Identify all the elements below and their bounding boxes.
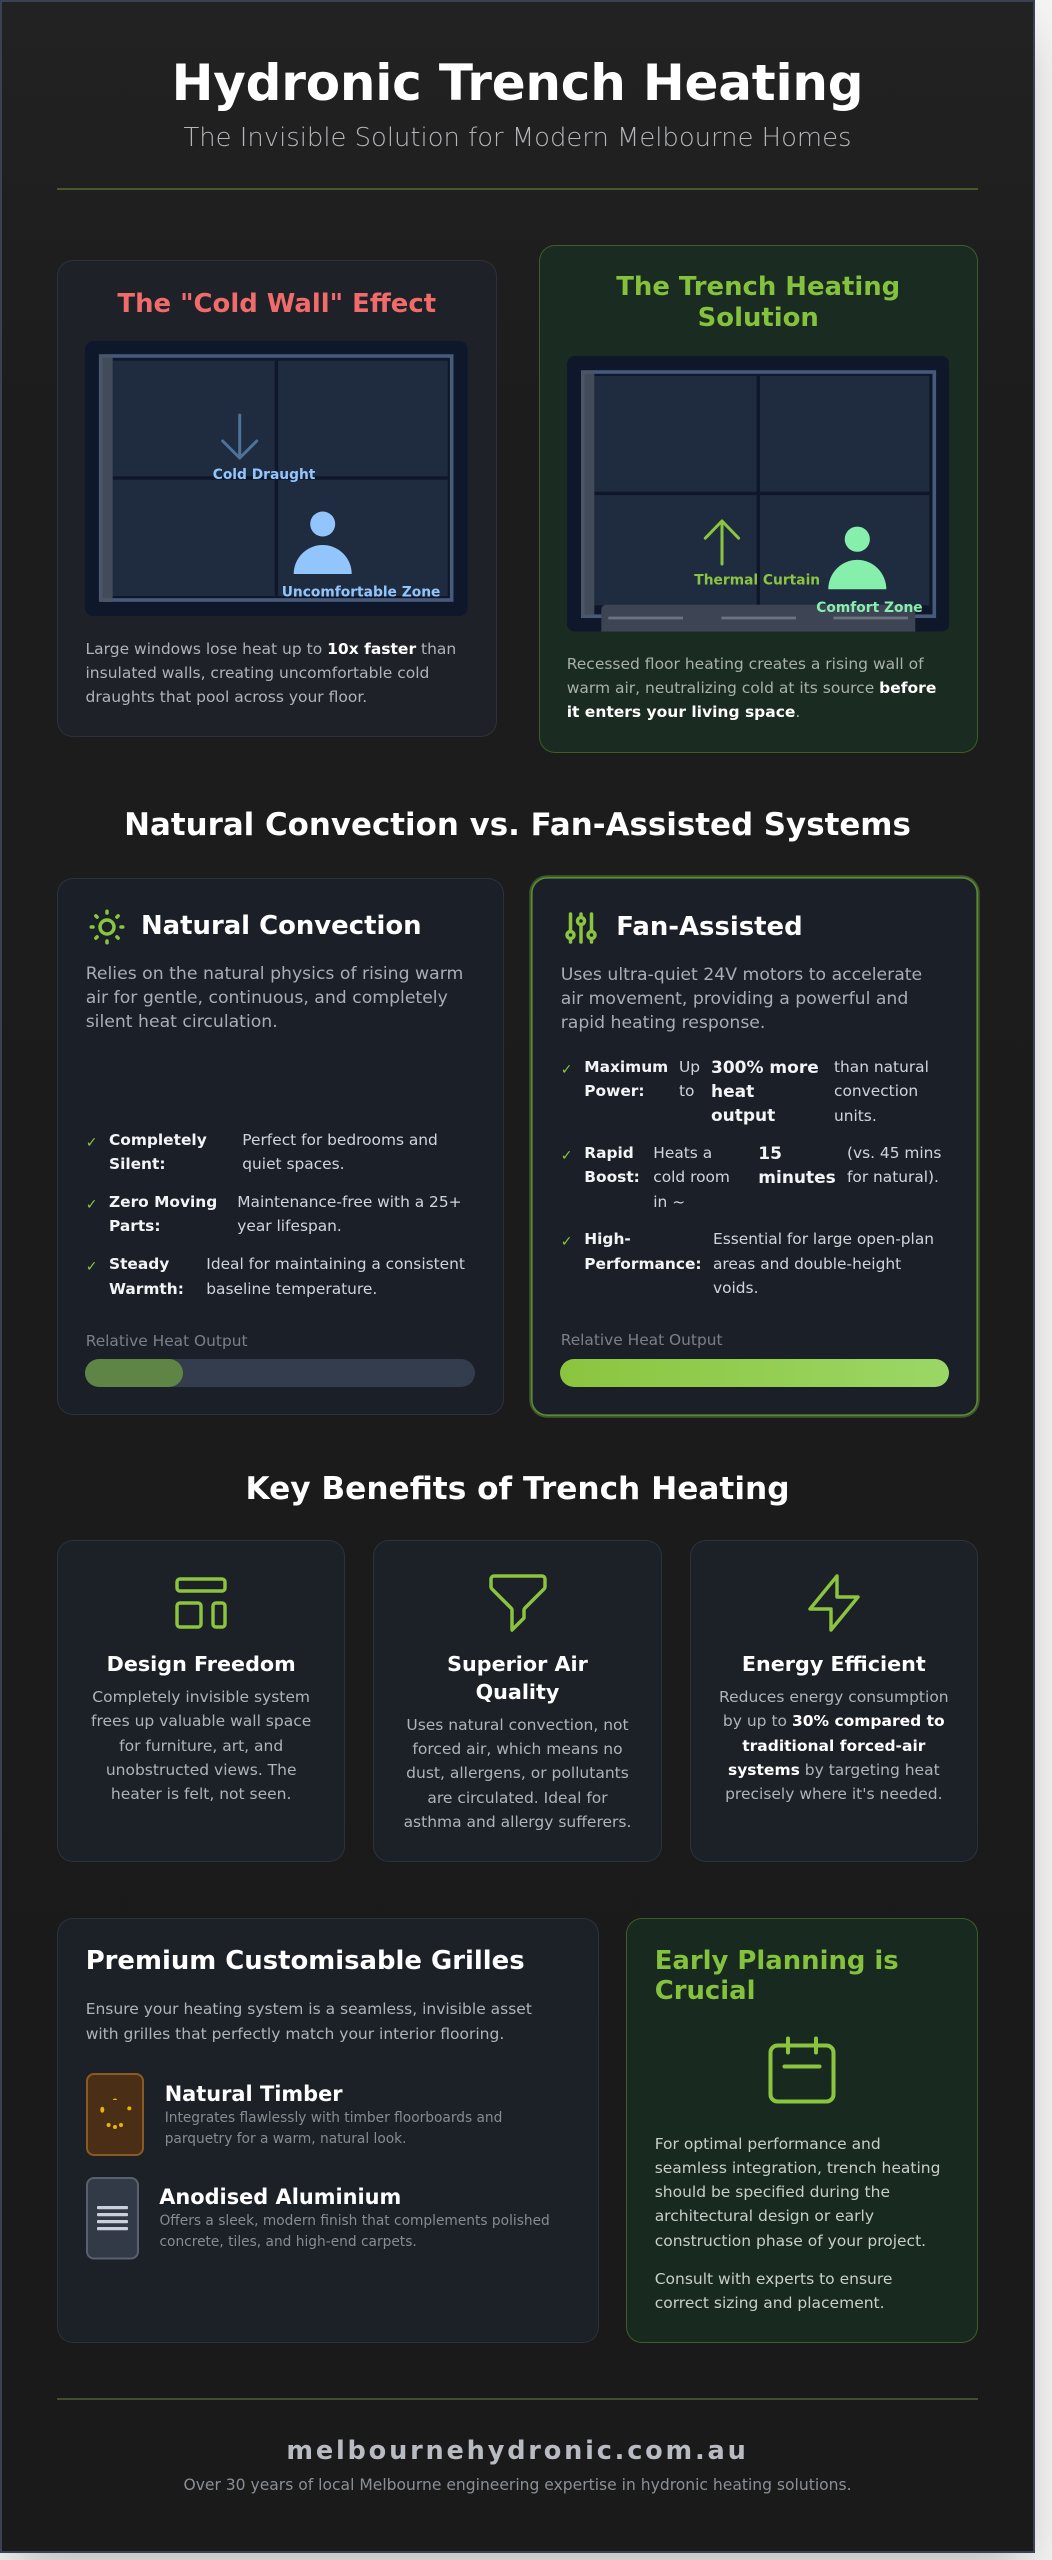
feature: completely silent: quiet spaces. bbox=[242, 1155, 345, 1173]
label: natural heat output: Relative Heat Output bbox=[86, 1332, 248, 1350]
text: superior air quality bbox=[404, 1716, 631, 1831]
footer: domain: melbournehydronic.com.au bbox=[286, 2436, 749, 2466]
text: superior air quality: forced air, which means no bbox=[412, 1740, 623, 1758]
panel: early planning bbox=[626, 1918, 978, 2343]
heading: design freedom: Design Freedom bbox=[107, 1652, 296, 1676]
text: energy efficient: systems by targeting heat bbox=[728, 1761, 940, 1779]
heading: key benefits: Key Benefits of Trench Heating bbox=[245, 1471, 790, 1507]
feature: rapid boost: for natural). bbox=[847, 1168, 939, 1186]
feature: steady warmth: baseline temperature. bbox=[206, 1280, 377, 1298]
text: superior air quality: asthma and allergy sufferers. bbox=[404, 1813, 631, 1831]
feature: maximum power: Up bbox=[679, 1058, 700, 1076]
text: solution explanation: warm air, neutralizing cold at its source before bbox=[567, 679, 936, 697]
text: anodised aluminium bbox=[159, 2213, 550, 2250]
chart: fan heat output bar bbox=[560, 1359, 949, 1387]
text: energy efficient: precisely where it's needed. bbox=[725, 1785, 943, 1803]
text: natural description: silent heat circulation. bbox=[86, 1012, 278, 1032]
grille option: anodised aluminium bbox=[86, 2177, 550, 2260]
label: fan heat output: Relative Heat Output bbox=[561, 1331, 723, 1349]
heading: superior air quality: Quality bbox=[476, 1680, 559, 1704]
arrow: thermal curtain bbox=[705, 521, 738, 564]
feature: steady warmth: Steady bbox=[109, 1255, 169, 1273]
text: solution explanation bbox=[567, 655, 936, 721]
footer: tagline: Over 30 years of local Melbourne engineering expertise in hydronic heating solutions. bbox=[183, 2476, 852, 2494]
text: planning advice: should be specified during the bbox=[655, 2183, 890, 2201]
text: grilles intro: with grilles that perfectly match your interior flooring. bbox=[86, 2025, 504, 2043]
feature: high performance: Essential for large open-plan bbox=[713, 1230, 934, 1248]
feature: rapid boost: Boost: bbox=[584, 1168, 640, 1186]
icon: bolt bbox=[808, 1574, 860, 1632]
text: natural description: air for gentle, continuous, and completely bbox=[86, 988, 448, 1008]
chart: natural heat output bar bbox=[85, 1359, 475, 1387]
text: solution explanation: it enters your living space. bbox=[567, 703, 800, 721]
panel: trench heating solution bbox=[538, 245, 978, 753]
text: superior air quality: Uses natural convection, not bbox=[406, 1716, 629, 1734]
feature: high performance: ✓ bbox=[561, 1234, 572, 1250]
icon: sliders bbox=[565, 912, 597, 944]
feature: zero moving parts bbox=[86, 1193, 462, 1235]
text: natural description bbox=[86, 964, 463, 1032]
feature: steady warmth: Warmth: bbox=[109, 1280, 184, 1298]
arrow: cold draught bbox=[223, 415, 257, 458]
feature: maximum power: 300% more bbox=[711, 1058, 819, 1078]
label: thermal curtain: Thermal Curtain bbox=[694, 573, 820, 589]
text: design freedom: Completely invisible system bbox=[92, 1688, 310, 1706]
feature: rapid boost: Rapid bbox=[584, 1144, 634, 1162]
text: natural timber: parquetry for a warm, natural look. bbox=[165, 2131, 406, 2147]
text: energy efficient: Reduces energy consumption bbox=[719, 1688, 949, 1706]
feature: steady warmth: ✓ bbox=[86, 1259, 97, 1275]
feature: zero moving parts: Zero Moving bbox=[109, 1193, 217, 1211]
panel: design freedom bbox=[57, 1540, 345, 1862]
text: superior air quality: dust, allergens, or pollutants bbox=[406, 1764, 629, 1782]
subtitle: The Invisible Solution for Modern Melbourne Homes bbox=[184, 123, 851, 153]
feature: maximum power: Maximum bbox=[584, 1058, 668, 1076]
text: fan description: rapid heating response. bbox=[561, 1012, 765, 1032]
feature: maximum power: than natural bbox=[834, 1058, 929, 1076]
icon: layout bbox=[175, 1577, 227, 1629]
heading: natural convection: Natural Convection bbox=[141, 911, 422, 941]
text: consult experts bbox=[655, 2270, 892, 2312]
feature: high performance: areas and double-height bbox=[713, 1255, 901, 1273]
text: planning advice: construction phase of your project. bbox=[655, 2232, 926, 2250]
grille: floor trench bbox=[601, 605, 915, 632]
text: planning advice: architectural design or early bbox=[655, 2207, 874, 2225]
heading: solution: Solution bbox=[698, 303, 819, 333]
heading: early planning: Early Planning is bbox=[655, 1946, 899, 1976]
feature: rapid boost: (vs. 45 mins bbox=[847, 1144, 941, 1162]
icon: timber swatch bbox=[86, 2073, 144, 2156]
panel: fan assisted bbox=[531, 877, 978, 1416]
feature: completely silent: Silent: bbox=[109, 1155, 166, 1173]
feature: maximum power: Power: bbox=[584, 1082, 645, 1100]
text: solution explanation: Recessed floor heating creates a rising wall of bbox=[567, 655, 924, 673]
label: uncomfortable zone: Uncomfortable Zone bbox=[282, 585, 441, 601]
text: design freedom bbox=[91, 1688, 311, 1803]
feature: zero moving parts: year lifespan. bbox=[237, 1217, 342, 1235]
feature: maximum power: units. bbox=[834, 1106, 877, 1124]
icon: calendar bbox=[768, 2036, 836, 2104]
icon: filter bbox=[489, 1574, 547, 1632]
text: grilles intro: Ensure your heating system is a seamless, invisible asset bbox=[86, 2000, 532, 2018]
feature: steady warmth bbox=[86, 1255, 465, 1298]
icon: comfortable person bbox=[828, 527, 886, 589]
heading: anodised aluminium: Anodised Aluminium bbox=[159, 2185, 401, 2209]
feature: maximum power: heat bbox=[711, 1082, 754, 1102]
text: cold wall explanation: draughts that pool across your floor. bbox=[86, 688, 367, 706]
feature: completely silent bbox=[86, 1131, 438, 1173]
panel: cold wall effect bbox=[57, 260, 496, 737]
icon: aluminium swatch bbox=[86, 2177, 139, 2260]
text: design freedom: heater is felt, not seen. bbox=[111, 1785, 291, 1803]
feature: rapid boost: cold room bbox=[653, 1168, 730, 1186]
icon: sun bbox=[90, 910, 124, 944]
text: anodised aluminium: concrete, tiles, and high-end carpets. bbox=[159, 2234, 417, 2250]
panel: energy efficient bbox=[690, 1540, 978, 1862]
feature: zero moving parts: Maintenance-free with a 25+ bbox=[237, 1193, 462, 1211]
text: consult experts: Consult with experts to ensure bbox=[655, 2270, 892, 2288]
text: planning advice: seamless integration, trench heating bbox=[655, 2159, 940, 2177]
text: fan description bbox=[561, 964, 922, 1032]
text: cold wall explanation: Large windows lose heat up to 10x faster than bbox=[86, 640, 456, 658]
text: energy efficient: by up to 30% compared to bbox=[723, 1712, 945, 1730]
heading: superior air quality bbox=[447, 1652, 588, 1704]
text: grilles intro bbox=[86, 2000, 532, 2043]
heading: cold wall: The "Cold Wall" Effect bbox=[117, 288, 436, 318]
feature: zero moving parts: ✓ bbox=[86, 1197, 97, 1213]
text: natural timber bbox=[165, 2110, 502, 2147]
grille option: natural timber bbox=[86, 2073, 502, 2156]
text: planning advice: For optimal performance and bbox=[655, 2135, 881, 2153]
feature: completely silent: Completely bbox=[109, 1131, 207, 1149]
label: cold draught: Cold Draught bbox=[213, 467, 316, 483]
heading: energy efficient: Energy Efficient bbox=[742, 1652, 926, 1676]
feature: rapid boost: minutes bbox=[758, 1168, 836, 1188]
text: natural timber: Integrates flawlessly with timber floorboards and bbox=[165, 2110, 502, 2126]
heading: solution bbox=[616, 272, 900, 333]
feature: high performance bbox=[561, 1230, 934, 1297]
diagram: trench heating window bbox=[567, 356, 949, 632]
text: energy efficient bbox=[719, 1688, 949, 1803]
label: comfort zone: Comfort Zone bbox=[816, 600, 922, 616]
text: superior air quality: are circulated. Ideal for bbox=[427, 1789, 608, 1807]
panel: superior air quality bbox=[373, 1540, 662, 1862]
feature: maximum power: to bbox=[679, 1082, 694, 1100]
feature: rapid boost: in ~ bbox=[653, 1193, 685, 1211]
text: fan description: air movement, providing a powerful and bbox=[561, 988, 908, 1008]
feature: rapid boost: ✓ bbox=[561, 1148, 572, 1164]
heading: natural timber: Natural Timber bbox=[165, 2082, 343, 2106]
heading: solution: The Trench Heating bbox=[616, 272, 900, 302]
feature: maximum power: output bbox=[711, 1106, 775, 1126]
panel: premium grilles bbox=[57, 1918, 598, 2343]
text: fan description: Uses ultra-quiet 24V motors to accelerate bbox=[561, 964, 922, 984]
feature: steady warmth: Ideal for maintaining a consistent bbox=[206, 1255, 465, 1273]
text: consult experts: correct sizing and placement. bbox=[655, 2294, 885, 2312]
feature: rapid boost bbox=[561, 1144, 941, 1211]
text: design freedom: frees up valuable wall space bbox=[91, 1712, 311, 1730]
feature: maximum power bbox=[561, 1058, 929, 1126]
feature: maximum power: convection bbox=[834, 1082, 918, 1100]
heading: premium grilles: Premium Customisable Grilles bbox=[86, 1946, 525, 1976]
feature: high performance: Performance: bbox=[584, 1255, 702, 1273]
feature: completely silent: Perfect for bedrooms and bbox=[242, 1131, 438, 1149]
text: energy efficient: traditional forced-air bbox=[742, 1737, 925, 1755]
heading: early planning: Crucial bbox=[655, 1976, 755, 2006]
heading: early planning bbox=[655, 1946, 899, 2006]
icon: cold person bbox=[294, 512, 352, 574]
feature: completely silent: ✓ bbox=[86, 1135, 97, 1151]
text: design freedom: unobstructed views. The bbox=[106, 1761, 296, 1779]
title: Hydronic Trench Heating bbox=[172, 54, 863, 112]
text: natural description: Relies on the natural physics of rising warm bbox=[86, 964, 463, 984]
heading: fan assisted: Fan-Assisted bbox=[616, 912, 803, 942]
feature: high performance: voids. bbox=[713, 1279, 758, 1297]
feature: rapid boost: 15 bbox=[758, 1144, 782, 1164]
text: anodised aluminium: Offers a sleek, modern finish that complements polished bbox=[159, 2213, 550, 2229]
feature: maximum power: ✓ bbox=[561, 1062, 572, 1078]
text: design freedom: for furniture, art, and bbox=[119, 1737, 283, 1755]
panel: natural convection bbox=[57, 878, 504, 1415]
diagram: cold wall window bbox=[85, 341, 468, 616]
feature: zero moving parts: Parts: bbox=[109, 1217, 160, 1235]
feature: rapid boost: Heats a bbox=[653, 1144, 712, 1162]
heading: comparison: Natural Convection vs. Fan-Assisted Systems bbox=[124, 807, 911, 843]
text: cold wall explanation bbox=[86, 640, 456, 706]
text: cold wall explanation: insulated walls, creating uncomfortable cold bbox=[86, 664, 429, 682]
text: planning advice bbox=[655, 2135, 940, 2250]
heading: superior air quality: Superior Air bbox=[447, 1652, 588, 1676]
feature: high performance: High- bbox=[584, 1230, 631, 1248]
